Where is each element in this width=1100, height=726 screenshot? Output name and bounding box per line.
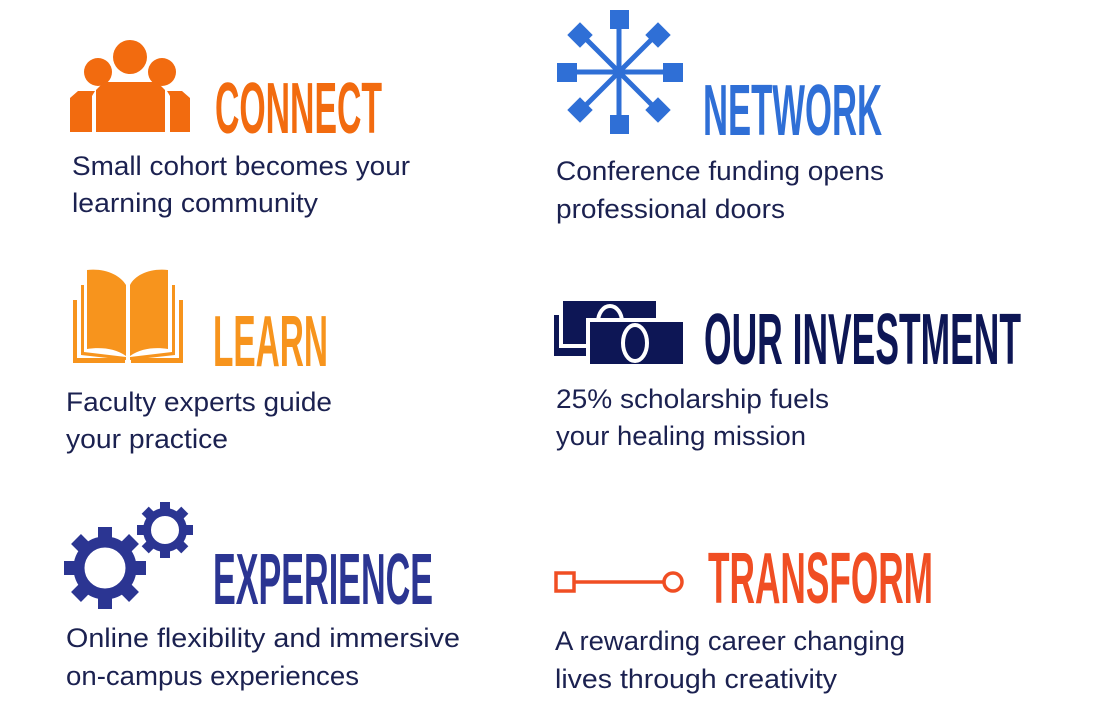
text: transform body: lives through creativity xyxy=(555,664,838,694)
text: investment body: 25% scholarship fuels xyxy=(556,384,829,414)
panel: experience xyxy=(64,502,460,691)
icon: gears xyxy=(64,502,193,609)
icon: people xyxy=(70,40,190,132)
icon: transform line xyxy=(556,573,682,591)
text: experience body: Online flexibility and immersive xyxy=(66,623,460,653)
text: investment body: your healing mission xyxy=(556,421,806,451)
text: connect body: Small cohort becomes your xyxy=(72,151,410,181)
text: LEARN xyxy=(213,302,328,382)
text: transform body xyxy=(555,626,905,694)
panel: transform xyxy=(555,539,933,694)
text: learn body: Faculty experts guide xyxy=(66,387,332,417)
text: network body: professional doors xyxy=(556,194,785,224)
icon: money xyxy=(554,296,687,368)
panel: our investment xyxy=(554,296,1021,451)
panel: learn xyxy=(66,270,332,454)
text: experience body: on-campus experiences xyxy=(66,661,359,691)
icon: network xyxy=(557,10,683,134)
text: connect body: learning community xyxy=(72,188,319,218)
text: learn body: your practice xyxy=(66,424,228,454)
panel: experience: EXPERIENCE xyxy=(213,540,433,620)
text: investment body xyxy=(556,384,829,451)
panel: connect: CONNECT xyxy=(215,69,382,149)
text: connect body xyxy=(72,151,410,218)
icon: book xyxy=(73,270,183,363)
text: transform body: A rewarding career changing xyxy=(555,626,905,656)
panel: network xyxy=(556,10,884,224)
text: experience body xyxy=(66,623,460,691)
text: network body: Conference funding opens xyxy=(556,156,884,186)
panel: connect xyxy=(70,40,410,218)
text: network body xyxy=(556,156,884,224)
text: NETWORK xyxy=(703,71,882,151)
text: learn body xyxy=(66,387,332,454)
